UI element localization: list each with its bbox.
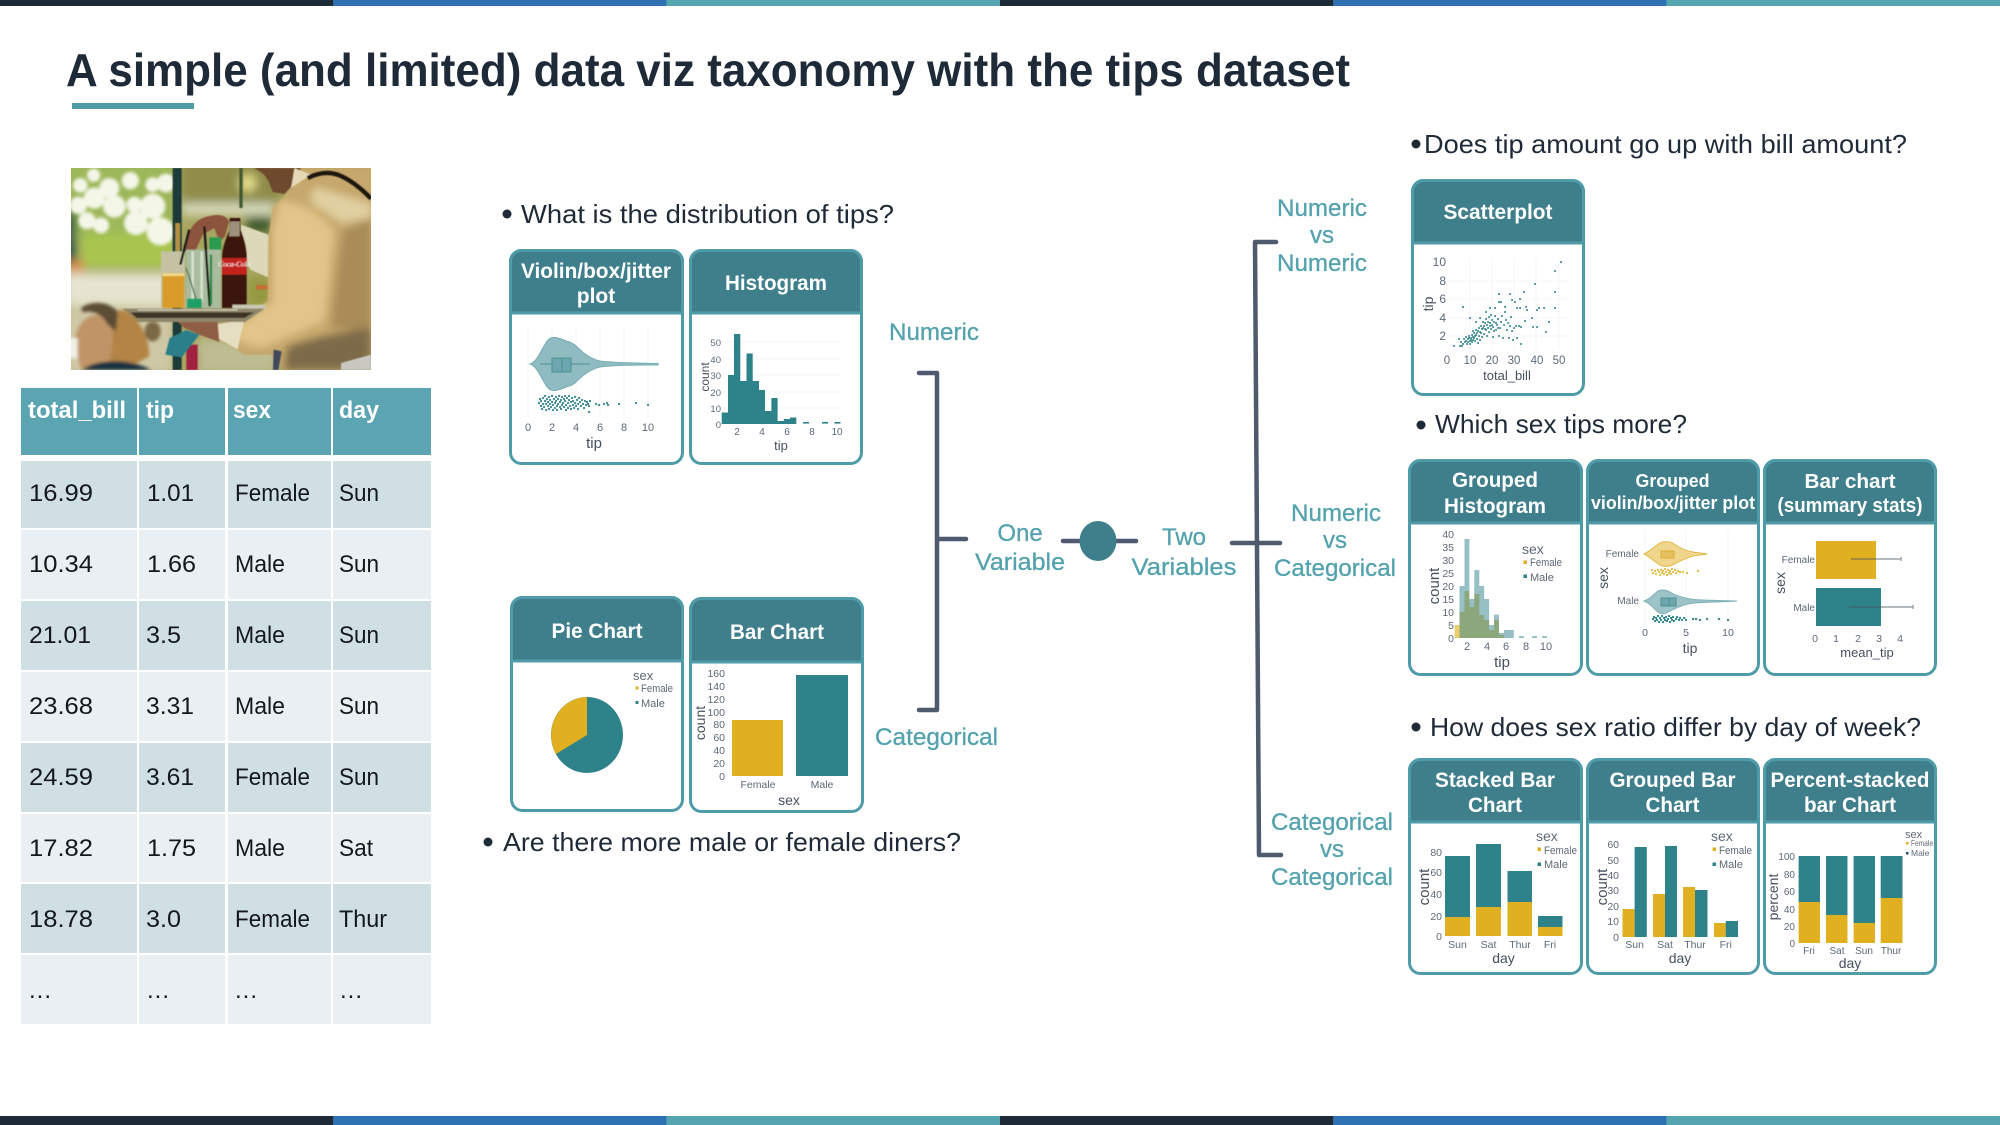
legend: Male	[1530, 572, 1554, 584]
label: one variable: Variable	[975, 549, 1065, 576]
axis labels: 60	[1607, 839, 1619, 851]
panel: histogram: Histogram	[725, 272, 827, 295]
root connector line	[1063, 539, 1136, 543]
label: categorical vs categorical: Categorical	[1271, 809, 1393, 836]
panel: scatterplot: Scatterplot	[1444, 201, 1553, 224]
table body rows: Male	[235, 551, 285, 578]
axis labels: 8	[1523, 641, 1529, 653]
axis labels: 40	[713, 745, 725, 757]
legend: Male	[1911, 848, 1930, 858]
axis labels: Sun	[1448, 939, 1467, 951]
beer glass	[161, 251, 185, 308]
panel: violin/box/jitter plot: plot	[577, 285, 615, 308]
axis labels	[1765, 852, 1902, 971]
table body rows: Thur	[339, 906, 387, 933]
axis labels: 10	[1464, 355, 1476, 367]
stacked bars	[1445, 844, 1562, 936]
axis labels: 60	[713, 732, 725, 744]
axis labels: 20	[1486, 355, 1498, 367]
axis labels: Sat	[1657, 939, 1673, 951]
axis labels: 20	[1442, 581, 1454, 593]
panel: grouped violin/box/jitter plot: Grouped	[1636, 471, 1710, 491]
label: two variables: Two	[1162, 524, 1206, 551]
axis labels: 20	[1430, 911, 1442, 923]
legend	[1522, 541, 1562, 584]
axis labels: 8	[621, 422, 627, 434]
axis labels: 5	[1448, 620, 1454, 632]
axis labels	[692, 668, 834, 808]
table body rows: 1.66	[147, 551, 196, 578]
table body rows: Sat	[339, 835, 373, 862]
violin shape	[530, 337, 658, 391]
axis labels: 6	[1439, 292, 1446, 306]
table body rows: 16.99	[29, 480, 93, 507]
table body rows: 17.82	[29, 835, 93, 862]
shirt base	[216, 168, 371, 370]
panel: grouped violin/box/jitter plot	[1588, 460, 1758, 674]
label: categorical vs categorical: vs	[1320, 836, 1344, 863]
label: numeric vs numeric: Numeric	[1277, 250, 1367, 277]
axis labels: Female	[1782, 555, 1815, 566]
scatter points	[1454, 262, 1561, 346]
axis labels: Female	[740, 779, 776, 791]
axis labels: 40	[1430, 889, 1442, 901]
legend: Male	[641, 698, 665, 710]
label: categorical: Categorical	[875, 724, 998, 751]
axis labels: percent	[1765, 874, 1781, 920]
table body rows: 3.5	[146, 622, 181, 649]
label: one variable	[975, 520, 1065, 576]
axis labels: 4	[573, 422, 579, 434]
axis labels: 10	[1433, 255, 1446, 269]
label: numeric vs numeric: Numeric	[1277, 195, 1367, 222]
axis labels	[1420, 255, 1565, 383]
table body rows: 3.0	[146, 906, 181, 933]
axis labels	[1772, 555, 1903, 660]
photo: waiter carrying a tray of drinks: Coca-Cola	[218, 260, 251, 269]
panel: bar chart of summary stats: Bar chart	[1804, 471, 1896, 493]
lower hand	[178, 322, 219, 342]
axis labels: 160	[707, 668, 725, 680]
table body rows	[21, 461, 431, 1024]
axis labels: 2	[1855, 633, 1861, 645]
axis labels: day	[1669, 950, 1691, 966]
table body rows: Male	[235, 693, 285, 720]
axis labels: 40	[1607, 870, 1619, 882]
axis labels: 30	[1508, 355, 1520, 367]
table header row: total_bill	[28, 397, 126, 424]
data table: tips dataset	[21, 388, 431, 1024]
axis labels: 3	[1876, 633, 1882, 645]
axis labels: 4	[1897, 633, 1903, 645]
table header row: day	[339, 397, 380, 424]
axis labels: Thur	[1684, 939, 1706, 951]
table body rows: ...	[147, 977, 169, 1004]
axis labels: Sat	[1481, 939, 1496, 951]
panel: scatterplot	[1412, 180, 1584, 394]
question: which sex tips more: Which sex tips more?	[1435, 409, 1687, 439]
straw and hand	[170, 223, 185, 255]
axis labels: 20	[1784, 922, 1795, 933]
axis labels: 1	[1833, 633, 1839, 645]
title underline	[72, 103, 194, 109]
table body rows: Sun	[339, 480, 379, 507]
label: numeric vs numeric	[1277, 195, 1367, 277]
label: one variable: One	[997, 520, 1043, 547]
panel: bar chart: Bar Chart	[730, 621, 824, 644]
jitter points	[539, 396, 648, 412]
legend: sex	[1711, 828, 1733, 844]
panel: pie chart: Pie Chart	[552, 620, 642, 643]
axis labels: 10	[710, 404, 721, 415]
axis labels: 60	[1784, 887, 1795, 898]
bars with error bars	[1816, 541, 1913, 626]
axis labels	[1594, 839, 1732, 966]
axis labels: 10	[1442, 607, 1454, 619]
axis labels: Fri	[1544, 939, 1556, 951]
axis labels	[698, 338, 843, 453]
axis labels: 20	[713, 758, 725, 770]
panel: grouped histogram: Histogram	[1444, 495, 1546, 518]
axis labels: 50	[710, 338, 721, 349]
axis labels: day	[1492, 950, 1515, 966]
waiter face and neck	[254, 168, 301, 194]
rolled sleeve	[241, 225, 271, 279]
axis labels: 100	[707, 707, 725, 719]
two-variables bracket	[1232, 242, 1281, 855]
legend: Male	[1544, 859, 1568, 871]
female violin	[1644, 542, 1707, 575]
panel: bar chart of summary stats: (summary stats)	[1778, 495, 1922, 517]
label: two variables: Variables	[1132, 554, 1236, 581]
axis labels: 0	[1444, 355, 1450, 367]
root node	[1080, 521, 1116, 561]
table body rows: ...	[340, 977, 362, 1004]
axis labels: 2	[549, 422, 555, 434]
table header row: sex	[233, 397, 272, 424]
panel: pie chart	[512, 598, 682, 810]
axis labels: 8	[809, 427, 815, 438]
axis labels: 60	[1430, 867, 1442, 879]
label: categorical vs categorical: Categorical	[1271, 864, 1393, 891]
axis labels: 10	[1540, 641, 1552, 653]
title: A simple (and limited) data viz taxonomy with the tips dataset	[66, 44, 1350, 96]
axis labels: 0	[1642, 627, 1648, 639]
axis labels: 140	[707, 681, 725, 693]
axis labels: 20	[710, 388, 721, 399]
axis labels: Sun	[1625, 939, 1644, 951]
napkin	[165, 330, 199, 357]
legend: sex	[1536, 828, 1558, 844]
label: numeric vs categorical: Numeric	[1291, 500, 1381, 527]
panel: percent-stacked bar chart: Percent-stacked	[1770, 769, 1930, 792]
axis labels: 80	[1784, 870, 1795, 881]
axis labels: 40	[1784, 905, 1795, 916]
axis labels: Male	[1617, 596, 1639, 607]
axis labels: Fri	[1803, 946, 1815, 957]
axis labels: 25	[1442, 568, 1454, 580]
axis labels: count	[698, 362, 712, 392]
table body rows: 23.68	[29, 693, 93, 720]
axis labels: 2	[1439, 329, 1446, 343]
pie	[551, 697, 623, 773]
axis labels: Male	[1793, 603, 1815, 614]
axis labels: tip	[1420, 296, 1436, 311]
legend: Female	[1530, 557, 1562, 569]
legend	[1711, 828, 1752, 871]
label: numeric vs categorical	[1274, 500, 1396, 582]
axis labels: Fri	[1720, 939, 1732, 951]
axis labels: 100	[1778, 852, 1795, 863]
axis labels: 15	[1442, 594, 1454, 606]
axis labels: sex	[778, 792, 800, 808]
axis labels: 40	[710, 355, 721, 366]
label: numeric vs categorical: vs	[1323, 527, 1347, 554]
axis labels: Female	[1606, 549, 1639, 560]
axis labels: 6	[1503, 641, 1509, 653]
table body rows: 3.61	[146, 764, 194, 791]
legend: Female	[1544, 845, 1577, 857]
table body rows: 1.75	[147, 835, 196, 862]
axis labels: 20	[1607, 901, 1619, 913]
question: distribution of tips: What is the distribution of tips?	[521, 199, 894, 229]
panel: stacked bar chart: Chart	[1468, 794, 1522, 817]
axis labels: 2	[734, 427, 740, 438]
table body rows: Male	[235, 835, 285, 862]
axis labels	[1595, 549, 1734, 656]
table body rows: Sun	[339, 551, 379, 578]
photo: waiter carrying a tray of drinks	[64, 161, 371, 375]
question: male or female diners: Are there more male or female diners?	[503, 827, 961, 857]
cola bottle	[222, 218, 247, 308]
axis labels: tip	[586, 435, 602, 452]
axis labels: 6	[784, 427, 790, 438]
panel: grouped histogram: Grouped	[1452, 469, 1538, 492]
axis labels: mean_tip	[1840, 645, 1894, 660]
axis labels: 120	[707, 694, 725, 706]
axis labels: 80	[1430, 847, 1442, 859]
legend: Male	[1719, 859, 1743, 871]
axis labels: 5	[1683, 627, 1689, 639]
axis labels: 35	[1442, 542, 1454, 554]
panel: grouped bar chart: Chart	[1646, 794, 1700, 817]
axis labels	[1416, 847, 1556, 966]
table header row: tip	[146, 397, 174, 424]
table body rows: 18.78	[29, 906, 93, 933]
axis labels: 0	[1448, 633, 1454, 645]
bars	[732, 675, 848, 776]
table body rows: 21.01	[29, 622, 91, 649]
tray	[123, 309, 264, 322]
axis labels: day	[1839, 955, 1861, 971]
axis labels: 10	[831, 427, 843, 438]
axis labels: tip	[1494, 654, 1510, 671]
table body rows: 1.01	[147, 480, 194, 507]
axis labels: 4	[1484, 641, 1490, 653]
label: numeric vs categorical: Categorical	[1274, 555, 1396, 582]
axis labels: 8	[1439, 274, 1446, 288]
label: categorical vs categorical	[1271, 809, 1393, 891]
axis labels: 0	[525, 422, 531, 434]
axis labels: 30	[1442, 555, 1454, 567]
legend: sex	[633, 668, 654, 683]
overlapping histogram bars	[1455, 539, 1547, 638]
legend: Female	[1911, 838, 1933, 848]
axis labels: 4	[1439, 311, 1446, 325]
axis labels: total_bill	[1483, 368, 1531, 383]
panel: grouped bar chart	[1588, 760, 1758, 974]
table body rows: ...	[235, 977, 257, 1004]
axis labels: 2	[1464, 641, 1470, 653]
axis labels: 10	[642, 422, 654, 434]
histogram bars	[722, 334, 840, 424]
axis labels: count	[1426, 567, 1443, 604]
panel: grouped violin/box/jitter plot: violin/box/jitter plot	[1591, 493, 1755, 513]
percent-stacked bars	[1799, 856, 1902, 943]
axis labels: Male	[811, 779, 834, 791]
panel: bar chart	[690, 598, 862, 812]
axis labels: count	[1416, 868, 1433, 905]
one-variable bracket	[919, 373, 966, 710]
axis labels: 50	[1607, 855, 1619, 867]
axis labels: Sun	[1855, 946, 1873, 957]
legend: Female	[1719, 845, 1752, 857]
axis labels: 0	[1613, 932, 1619, 944]
legend: sex	[1905, 829, 1923, 841]
shirt shading	[234, 186, 371, 370]
axis labels: count	[1594, 868, 1611, 905]
panel: percent-stacked bar chart: bar Chart	[1804, 794, 1896, 817]
box plot	[540, 358, 590, 372]
axis labels: 80	[713, 719, 725, 731]
table body rows: 3.31	[146, 693, 194, 720]
panel: stacked bar chart	[1410, 760, 1582, 974]
panel: histogram	[690, 250, 862, 464]
axis labels: Thur	[1881, 946, 1902, 957]
label: numeric: Numeric	[889, 319, 979, 346]
label: two variables	[1132, 524, 1236, 581]
table header row	[21, 388, 431, 455]
legend: sex	[1522, 541, 1544, 557]
table body rows: 24.59	[29, 764, 93, 791]
axis labels: 0	[1436, 931, 1442, 943]
legend	[1905, 829, 1933, 858]
axis labels: 4	[759, 427, 765, 438]
clear glass	[186, 250, 221, 308]
legend	[633, 668, 673, 710]
axis labels: 6	[597, 422, 603, 434]
axis labels: 10	[1607, 916, 1619, 928]
axis labels: 0	[1789, 939, 1795, 950]
panel: grouped histogram	[1410, 460, 1582, 674]
axis labels: 30	[710, 371, 721, 382]
panel: violin/box/jitter plot: Violin/box/jitter	[521, 260, 671, 283]
axis labels: 30	[1607, 885, 1619, 897]
axis labels	[525, 422, 654, 452]
axis labels: 50	[1553, 355, 1565, 367]
axis labels: 0	[716, 420, 721, 431]
axis labels: 0	[719, 771, 725, 783]
male violin	[1644, 590, 1737, 622]
table body rows: Male	[235, 622, 285, 649]
grouped bars	[1622, 846, 1738, 937]
axis labels: 40	[1442, 529, 1454, 541]
axis labels: tip	[1683, 640, 1698, 656]
label: numeric vs numeric: vs	[1310, 222, 1334, 249]
table body rows: 10.34	[29, 551, 93, 578]
question: tip vs bill: Does tip amount go up with bill amount?	[1424, 129, 1907, 159]
table body rows: Female	[235, 906, 310, 933]
legend: Female	[641, 683, 673, 695]
axis labels: 10	[1722, 627, 1734, 639]
green bottle	[209, 237, 221, 254]
table body rows: Sun	[339, 622, 379, 649]
table body rows: ...	[29, 977, 51, 1004]
axis labels: 40	[1531, 355, 1543, 367]
panel: violin/box/jitter plot	[510, 250, 682, 464]
panel: grouped bar chart: Grouped Bar	[1610, 769, 1736, 792]
panel: percent-stacked bar chart	[1764, 760, 1936, 974]
axis labels: 0	[1812, 633, 1818, 645]
question: sex ratio by day: How does sex ratio differ by day of week?	[1430, 712, 1921, 742]
table body rows: Female	[235, 480, 310, 507]
table body rows: Sun	[339, 693, 379, 720]
axis labels: tip	[774, 438, 788, 453]
axis labels: sex	[1595, 567, 1611, 589]
axis labels: count	[692, 706, 708, 740]
legend	[1536, 828, 1577, 871]
axis labels: Sat	[1829, 946, 1845, 957]
axis labels	[1426, 529, 1552, 671]
axis labels: Thur	[1509, 939, 1531, 951]
table body rows: Sun	[339, 764, 379, 791]
panel: stacked bar chart: Stacked Bar	[1435, 769, 1555, 792]
panel: bar chart of summary stats	[1764, 460, 1936, 674]
table body rows: Female	[235, 764, 310, 791]
axis labels: sex	[1772, 572, 1788, 594]
